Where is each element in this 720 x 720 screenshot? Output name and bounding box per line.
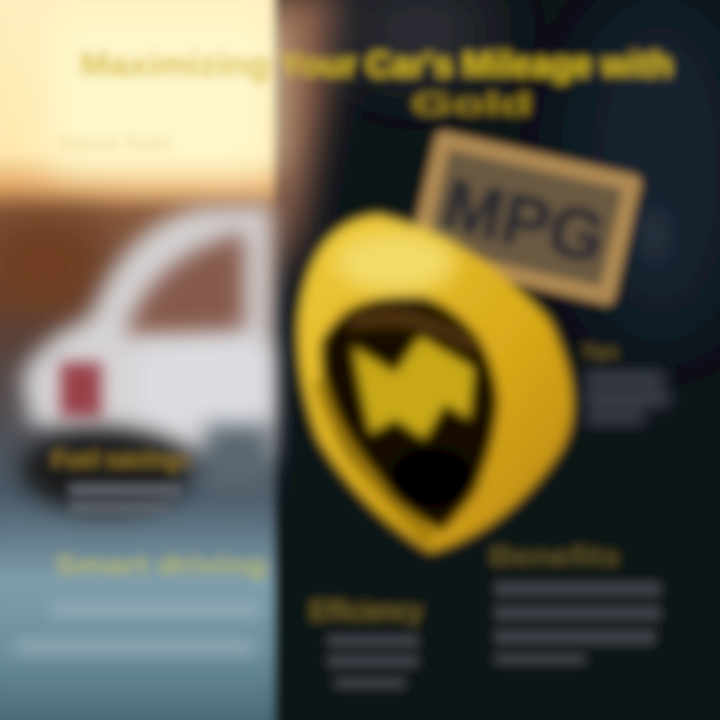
bottom left heading: Efficiency bbox=[310, 595, 422, 626]
right callout: body bbox=[585, 372, 670, 424]
left text: pale lines bbox=[15, 603, 260, 654]
badge: MPG tag: MPG bbox=[435, 164, 613, 279]
left text: caption body bbox=[70, 485, 180, 512]
title bbox=[80, 46, 672, 121]
bottom centre heading: Benefits bbox=[490, 541, 620, 571]
left text: yellow-green highlight: Smart driving bbox=[55, 550, 267, 580]
icon: gold ring bbox=[298, 214, 574, 553]
title: Maximizing Your Car's Mileage with bbox=[80, 46, 672, 84]
bottom left body bbox=[328, 635, 418, 688]
badge: MPG tag bbox=[408, 130, 642, 306]
panel: left photo of car at sunset bbox=[0, 0, 274, 720]
title: Gold bbox=[412, 88, 532, 121]
left text: caption heading: Fuel savings bbox=[52, 446, 192, 473]
bottom centre body bbox=[495, 582, 660, 664]
panel: dark right background bbox=[262, 0, 720, 720]
right callout: heading: Tips bbox=[582, 342, 619, 362]
faint tag shadow bbox=[643, 207, 667, 263]
car body bbox=[20, 205, 272, 512]
left text: sun caption: Save fuel bbox=[60, 130, 170, 155]
